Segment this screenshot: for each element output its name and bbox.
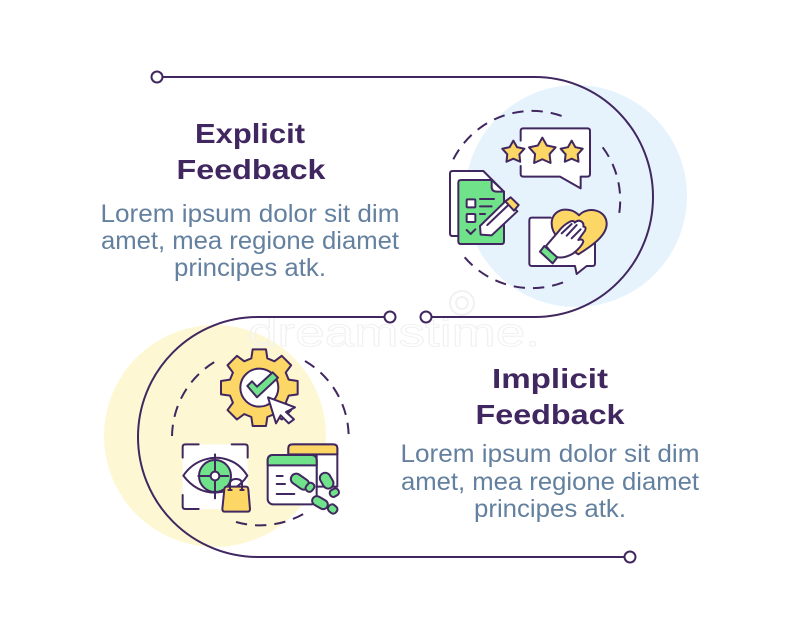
- dashed ring: [453, 111, 620, 288]
- icon: heart and hand bubble: [529, 210, 607, 274]
- text block: implicit feedback: amet, mea regione diamet: [401, 468, 699, 496]
- watermark: dreamstime.: [248, 311, 540, 355]
- dashed ring: [172, 361, 349, 525]
- heading: implicit feedback: [476, 363, 625, 430]
- text block: explicit feedback: Lorem ipsum dolor sit dim: [100, 200, 400, 228]
- text block: explicit feedback: principes atk.: [174, 254, 326, 282]
- heading: implicit feedback: Feedback: [476, 399, 625, 430]
- icon group: explicit feedback: [450, 111, 620, 288]
- circle: blue backdrop: [465, 85, 687, 307]
- icon: browser windows and footprints: [268, 444, 340, 515]
- text block: explicit feedback: amet, mea regione diamet: [101, 227, 399, 255]
- heading: implicit feedback: Implicit: [492, 363, 608, 394]
- icon: rating bubble: [502, 128, 590, 188]
- heading: explicit feedback: [176, 118, 326, 185]
- heading: explicit feedback: Feedback: [176, 154, 326, 185]
- circle: yellow backdrop: [104, 325, 326, 547]
- icon: gear with check and cursor: [221, 349, 298, 426]
- heading: explicit feedback: Explicit: [195, 118, 305, 149]
- text block: implicit feedback: principes atk.: [474, 495, 626, 523]
- text block: explicit feedback: [100, 200, 400, 282]
- icon: eye tracking and shopping bag: [183, 444, 250, 512]
- connector: bottom path: [138, 312, 636, 562]
- text block: implicit feedback: [400, 440, 700, 523]
- icon: checklist and pencil: [450, 171, 519, 244]
- connector: top path: [152, 72, 653, 322]
- text block: implicit feedback: Lorem ipsum dolor sit dim: [400, 440, 700, 468]
- icon group: implicit feedback: [172, 349, 349, 525]
- watermark: [248, 291, 540, 355]
